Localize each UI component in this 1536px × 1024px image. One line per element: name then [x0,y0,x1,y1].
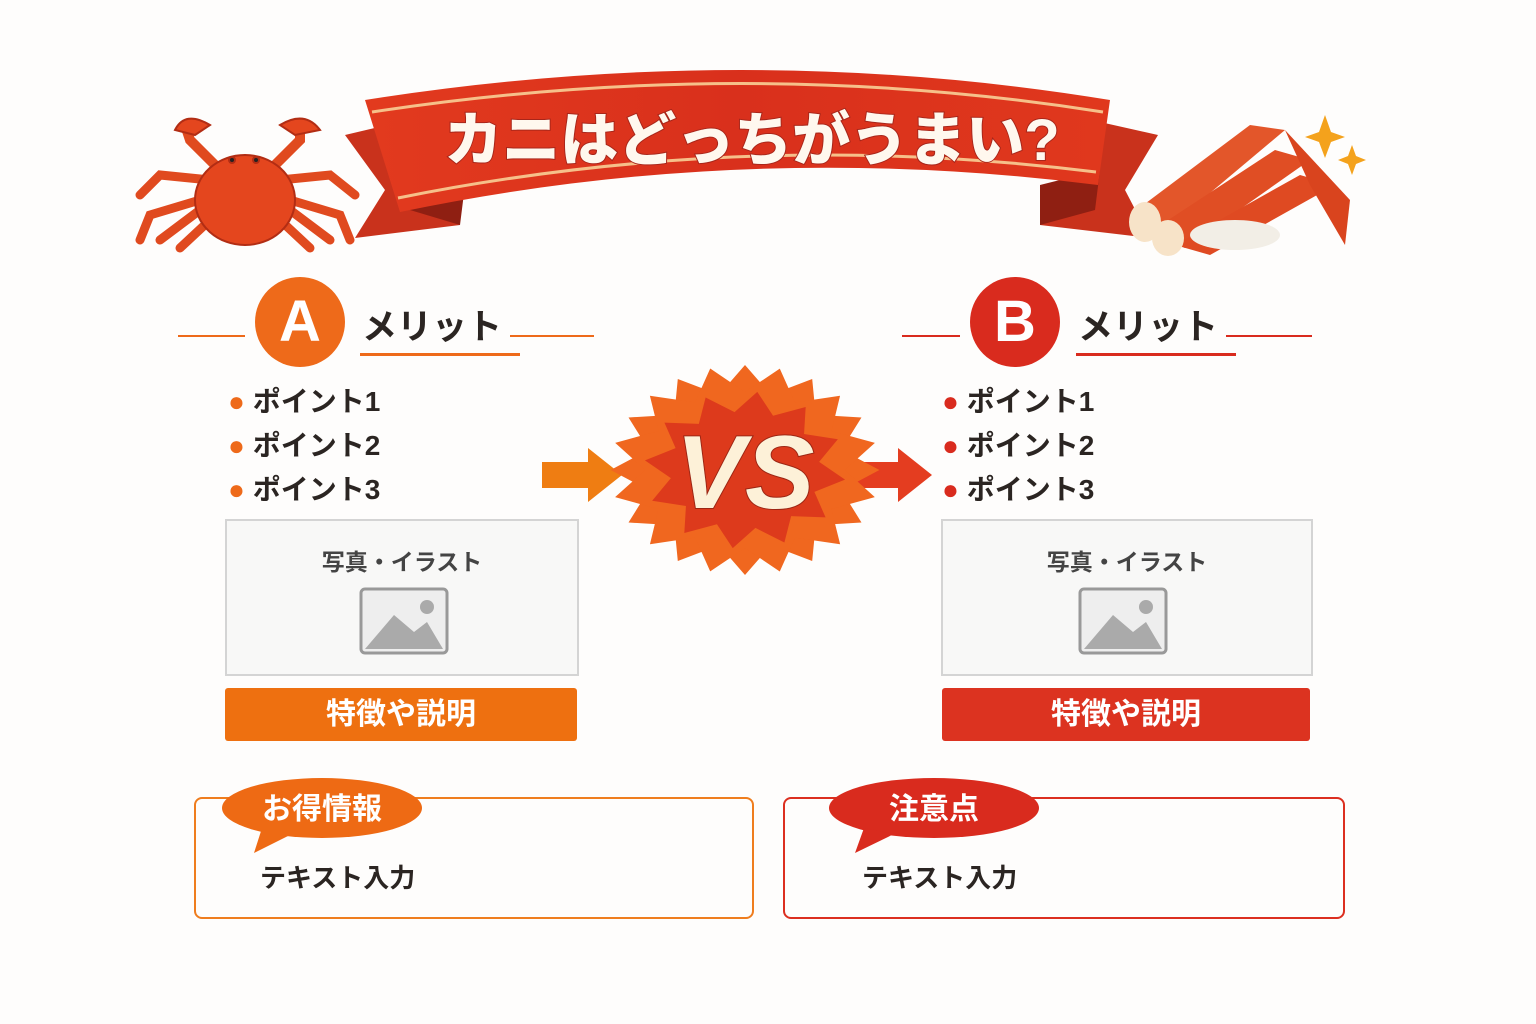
text: テキスト入力 [862,863,1017,893]
heading A: メリット [362,308,502,347]
bullets A: ● ポイント1 [228,386,380,417]
banner ribbon [365,70,1110,212]
button A [225,688,577,741]
photo box A: 写真・イラスト [322,549,482,575]
bullets B: ● ポイント3 [942,474,1094,505]
VS burst with arrows [542,365,932,575]
info box: 注意点 [783,778,1345,919]
icon: sparkles [1305,115,1366,175]
icon: badge A: A [279,289,321,354]
callout bubble [222,778,422,853]
panel A header [178,277,594,367]
title text: カニはどっちがうまい? [444,108,1060,173]
text: テキスト入力 [260,863,415,893]
photo box B [941,519,1313,676]
bullets A [228,386,380,505]
VS burst with arrows: VS [676,415,814,531]
icon: image placeholder [360,588,448,654]
button A: 特徴や説明 [326,698,476,731]
bullets B: ● ポイント1 [942,386,1094,417]
icon: badge A [255,277,345,367]
banner tail right [1040,122,1158,238]
callout bubble: 注意点 [889,793,979,826]
icon: badge B: B [994,289,1036,354]
bullets A: ● ポイント3 [228,474,380,505]
heading B: メリット [1078,308,1218,347]
icon: crab [140,119,355,248]
panel B header [902,277,1312,367]
bullets A: ● ポイント2 [228,430,380,461]
icon: badge B [970,277,1060,367]
bullets B [942,386,1094,505]
icon: image placeholder [1078,588,1168,654]
callout bubble: お得情報 [262,793,382,826]
callout bubble [829,778,1039,853]
arrow left [542,448,622,502]
info box: お得情報 [194,778,754,919]
bullets B: ● ポイント2 [942,430,1094,461]
banner tail left [345,122,465,238]
icon: crab legs [1129,125,1350,256]
button B [942,688,1310,741]
button B: 特徴や説明 [1051,698,1201,731]
photo box B: 写真・イラスト [1047,549,1207,575]
arrow right [850,448,932,502]
photo box A [225,519,579,676]
title banner [136,70,1366,256]
